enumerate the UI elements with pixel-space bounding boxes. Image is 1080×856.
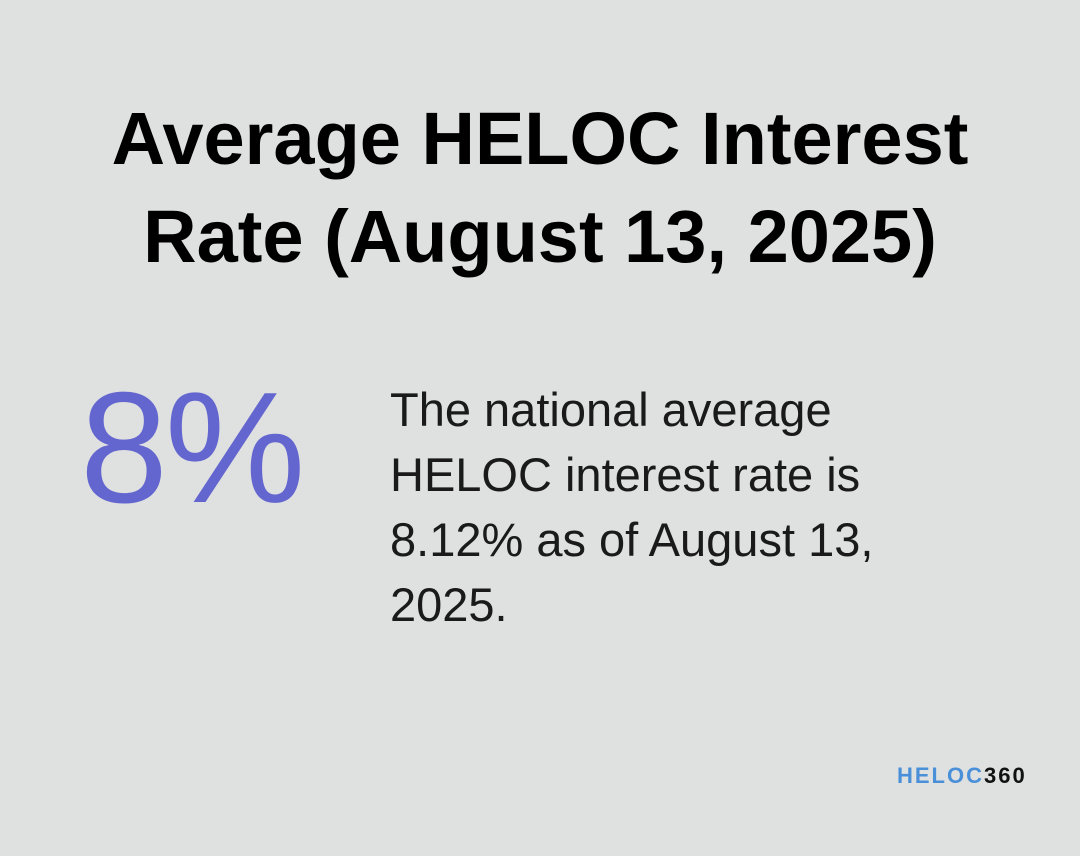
description text: 2025.	[390, 578, 508, 631]
description text: HELOC interest rate is	[390, 448, 860, 501]
big stat: 8%: 8%	[80, 360, 302, 536]
logo: HELOC360: HELOC360	[897, 763, 1027, 788]
description text: The national average	[390, 383, 832, 436]
description text	[390, 383, 873, 631]
title: Average HELOC Interest	[112, 97, 968, 180]
title: Rate (August 13, 2025)	[143, 195, 937, 278]
title	[112, 97, 968, 278]
description text: 8.12% as of August 13,	[390, 513, 873, 566]
